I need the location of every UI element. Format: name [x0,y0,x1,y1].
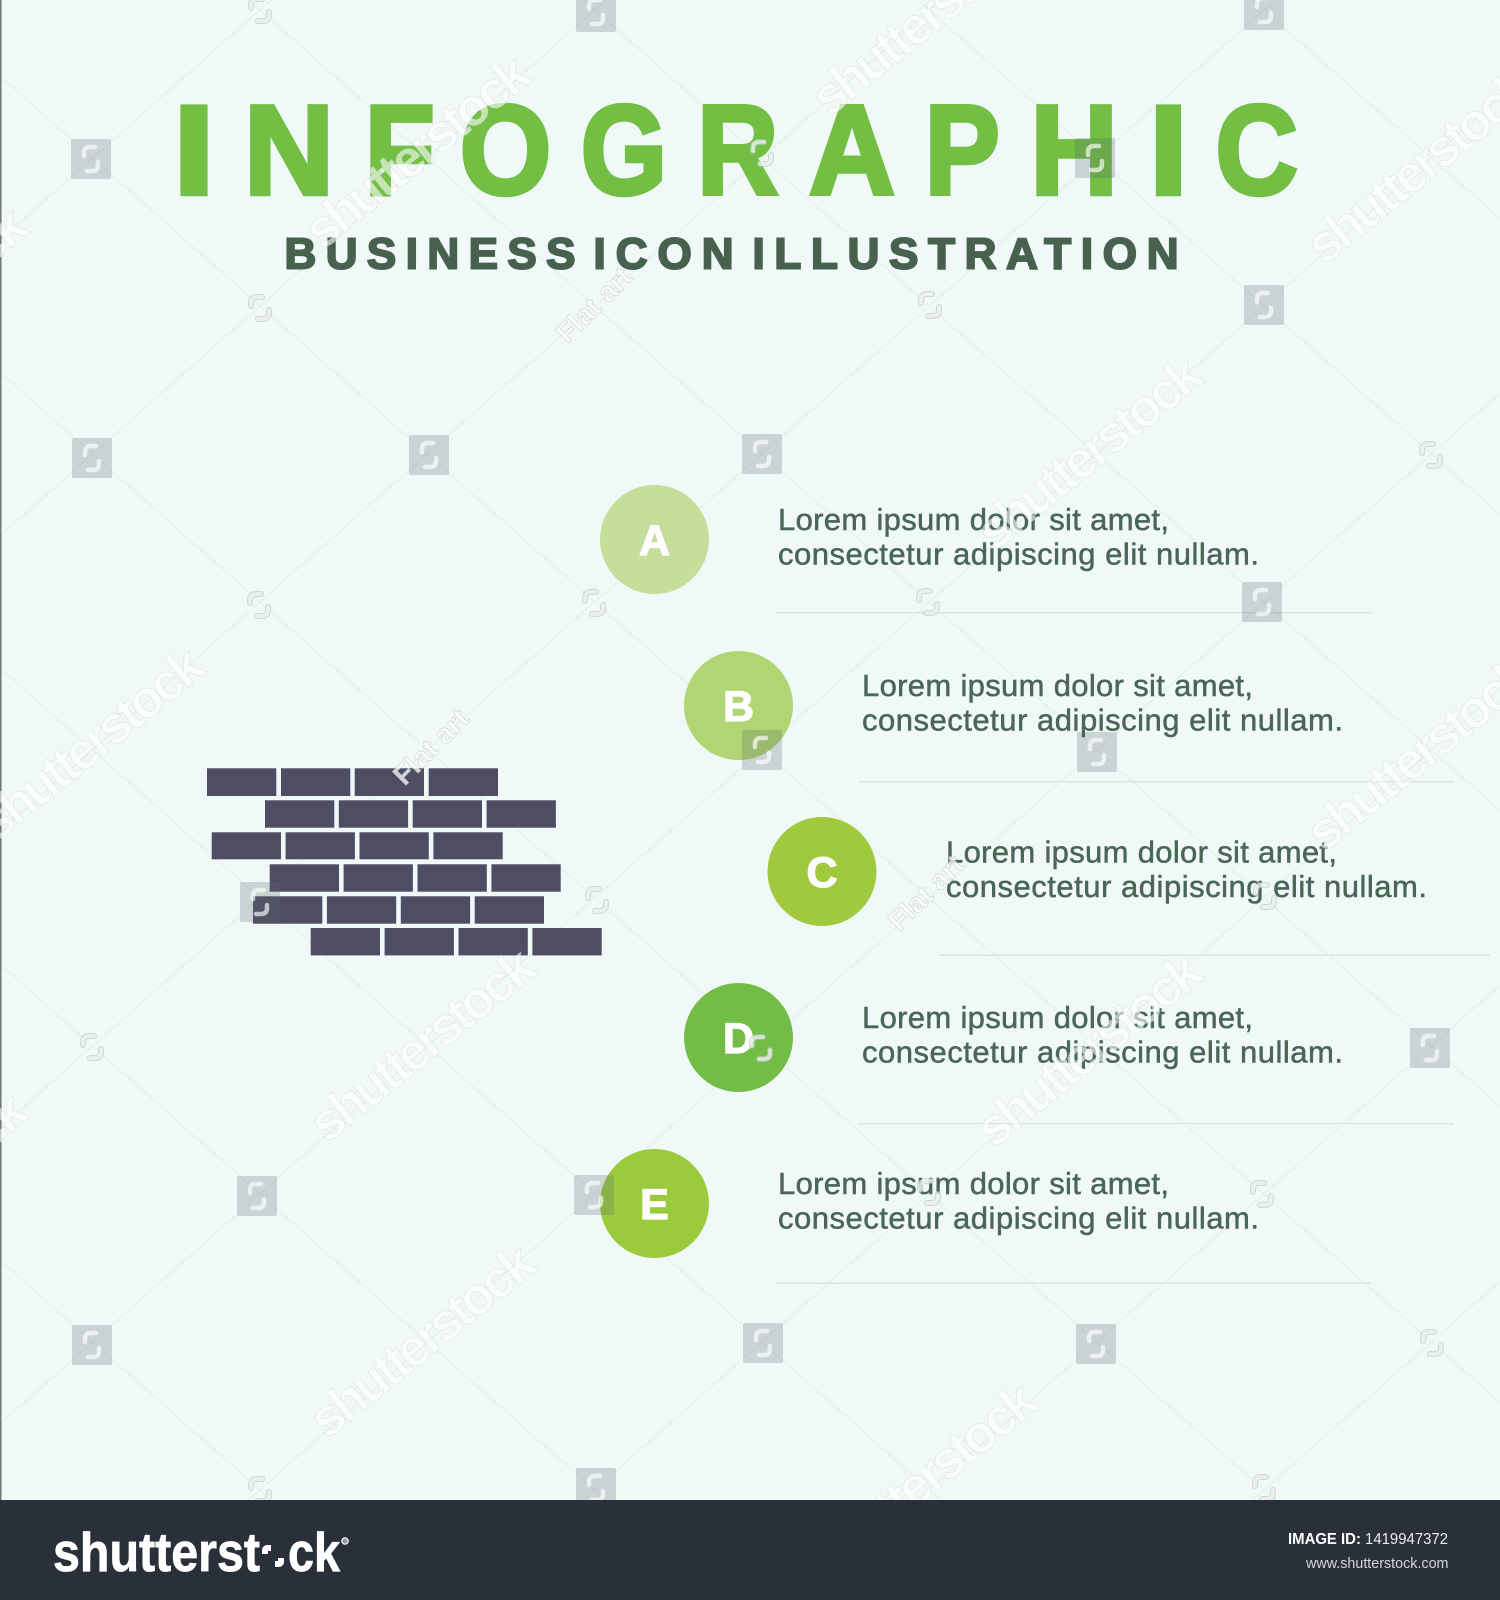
badge A [600,485,709,594]
subtitle: BUSINESS ICON ILLUSTRATION: ICON [594,230,734,278]
watermark: shutterstock diagonal text: shutterstock [800,1371,1048,1587]
text A [778,502,1259,572]
title: INFOGRAPHIC: I [173,79,215,221]
badge D [684,983,793,1092]
watermark: Flat art labels: Flat art [882,849,970,937]
watermark: shutterstock diagonal text: shutterstock [965,345,1213,561]
text B: consectetur adipiscing elit nullam. [862,702,1343,738]
title: INFOGRAPHIC: C [1216,79,1298,221]
text C: Lorem ipsum dolor sit amet, [946,835,1337,870]
text B [862,668,1343,738]
badge E: E [640,1181,669,1229]
watermark: shutterstock diagonal text: shutterstock [298,937,546,1153]
step D [684,983,1454,1124]
title: INFOGRAPHIC: I [1149,79,1188,221]
icon: brick wall [207,768,602,955]
badge C: C [806,849,838,897]
title: INFOGRAPHIC: H [1030,79,1118,221]
title: INFOGRAPHIC: F [365,79,435,221]
footer url: www.shutterstock.com [1305,1555,1448,1572]
text D [862,1000,1343,1070]
text B: Lorem ipsum dolor sit amet, [862,668,1253,703]
subtitle: BUSINESS ICON ILLUSTRATION: ILLUSTRATION [752,230,1178,278]
title: INFOGRAPHIC: R [697,79,778,221]
step E [600,1149,1371,1284]
badge D: D [723,1015,754,1063]
text C: consectetur adipiscing elit nullam. [946,869,1427,904]
title: INFOGRAPHIC: P [925,79,1000,221]
title: INFOGRAPHIC: N [244,79,334,221]
text A: consectetur adipiscing elit nullam. [778,536,1259,572]
text D: consectetur adipiscing elit nullam. [862,1034,1343,1070]
title: INFOGRAPHIC: G [581,79,667,221]
watermark: Flat art labels: Flat art [387,703,475,791]
step C [768,817,1490,956]
title: INFOGRAPHIC: O [460,79,551,221]
watermark: Flat art labels: Flat art [550,261,638,349]
title: INFOGRAPHIC [173,79,1298,221]
badge A: A [639,517,670,565]
badge C [768,817,876,926]
subtitle: BUSINESS ICON ILLUSTRATION: BUSINESS [284,230,576,278]
footer logo: shutterstock: shutterst [53,1521,260,1583]
footer image id: IMAGE ID: 1419947372 [1288,1531,1448,1548]
badge B [684,651,793,760]
text D: Lorem ipsum dolor sit amet, [862,1000,1253,1035]
title: INFOGRAPHIC: A [809,79,895,221]
step A [600,485,1371,613]
subtitle: BUSINESS ICON ILLUSTRATION [284,230,1178,278]
step B [684,651,1454,782]
watermark: shutterstock diagonal text: shutterstock [293,44,541,260]
text A: Lorem ipsum dolor sit amet, [778,502,1169,537]
footer logo: shutterstock: ck [288,1521,340,1583]
footer bar [0,1500,1500,1600]
text E: Lorem ipsum dolor sit amet, [778,1166,1169,1201]
text C [946,835,1427,904]
watermark: shutterstock diagonal text: shutterstock [965,942,1213,1158]
text E [778,1166,1259,1236]
badge E [600,1149,709,1258]
watermark: Flat art labels [387,261,970,937]
text E: consectetur adipiscing elit nullam. [778,1200,1259,1236]
badge B: B [723,683,754,731]
watermark: shutterstock diagonal text: shutterstock [298,1233,546,1449]
